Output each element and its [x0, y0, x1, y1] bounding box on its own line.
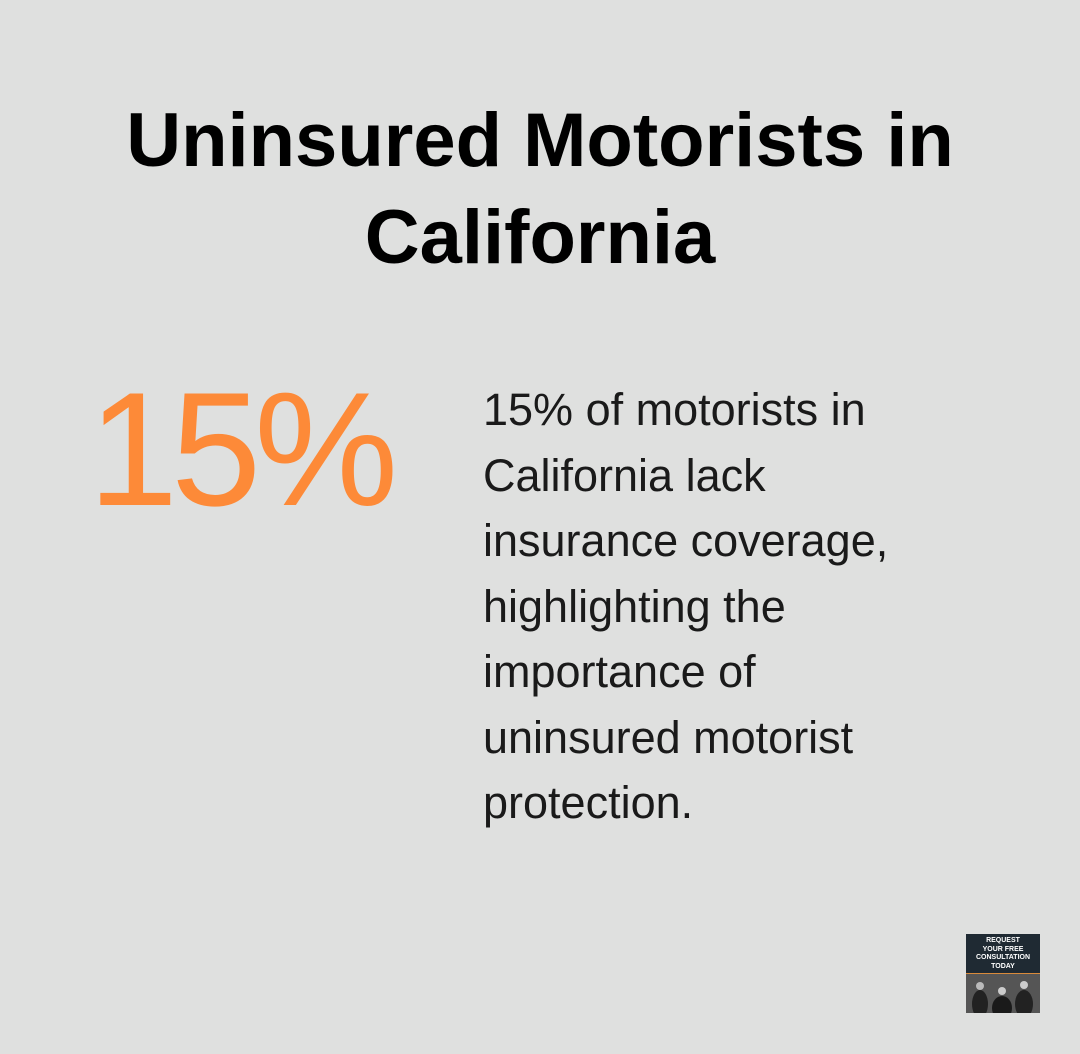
description text: California lack [483, 450, 766, 500]
description text: insurance coverage, [483, 515, 888, 566]
big stat: 15% [88, 359, 391, 540]
description text [483, 384, 888, 828]
logo: consultation badge: REQUEST [986, 937, 1020, 944]
title [126, 98, 954, 280]
title: California [365, 195, 715, 280]
description text: highlighting the [483, 580, 786, 632]
description text: protection. [483, 777, 693, 828]
logo: consultation badge: CONSULTATION [976, 954, 1030, 961]
description text: importance of [483, 646, 756, 697]
description text: 15% of motorists in [483, 384, 866, 435]
logo: consultation badge: YOUR FREE [983, 946, 1023, 952]
description text: uninsured motorist [483, 712, 853, 762]
logo: consultation badge [966, 934, 1040, 1013]
logo: consultation badge: TODAY [991, 962, 1015, 970]
title: Uninsured Motorists in [126, 98, 954, 183]
